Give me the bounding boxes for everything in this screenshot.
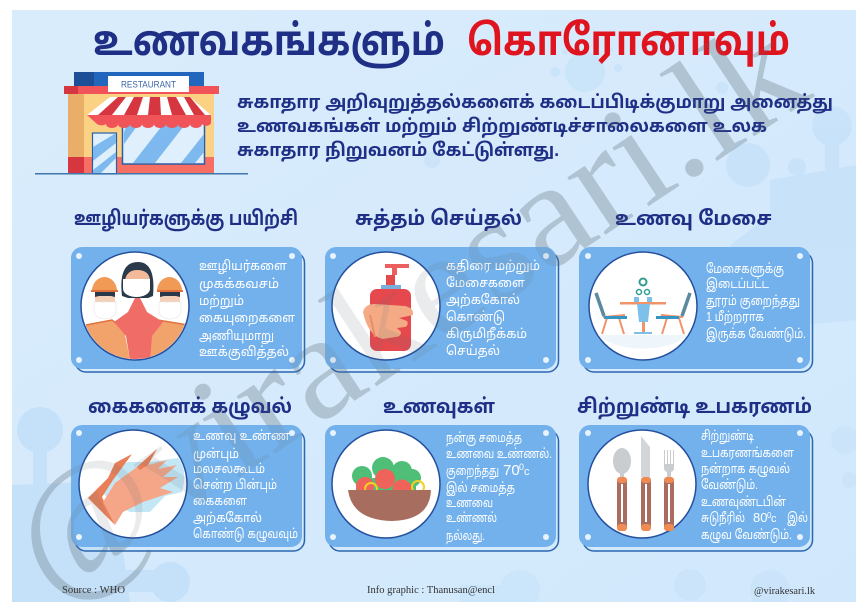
title: உணவகங்களும் (93, 17, 445, 69)
panel text: 1 மீற்றராக (706, 309, 764, 325)
panel text (701, 428, 808, 543)
ground line (35, 173, 248, 174)
restaurant sign (108, 76, 189, 92)
heading: சிற்றுண்டி உபகரணம் (577, 396, 812, 420)
panel text: உண்ணல் (446, 510, 497, 525)
icon: restaurant (35, 72, 248, 174)
panel text: அற்ககோல் (193, 510, 262, 526)
panel text: வேண்டும். (701, 477, 758, 493)
panel text: 0 (519, 462, 524, 472)
panel text: அணியுமாறு (199, 328, 274, 344)
intro text: உணவகங்கள் மற்றும் சிற்றுண்டிச்சாலைகளை உலக (237, 116, 767, 138)
panel: staff training (71, 208, 304, 372)
panel text: 0 (767, 511, 772, 520)
intro text: சுகாதார நிறுவனம் கேட்டுள்ளது. (237, 140, 559, 162)
intro text (237, 92, 833, 162)
footer credits: Source : WHO (62, 585, 125, 596)
panel text (706, 261, 806, 342)
panel text: ஊழியர்களை (199, 258, 287, 274)
panel text: நன்கு சமைத்த (446, 430, 522, 446)
icon: masked workers (81, 252, 190, 360)
icon: sanitizer bottle (332, 252, 440, 360)
shop window (122, 122, 204, 164)
heading: ஊழியர்களுக்கு பயிற்சி (74, 208, 298, 232)
awning (87, 97, 211, 128)
panel text: குறைந்தது (446, 463, 499, 479)
panel text: ஊக்குவித்தல் (199, 344, 289, 360)
panel text: கொண்டு (446, 309, 505, 325)
panel text: சுடுநீரில் (701, 510, 745, 526)
virus: top center (550, 47, 622, 92)
panel text: மற்றும் (199, 293, 244, 309)
panel text: முகக்கவசம் (199, 276, 279, 292)
panel text: கதிரை மற்றும் (446, 258, 540, 274)
panel text: அற்ககோல் (446, 292, 520, 308)
footer credits: @virakesari.lk (754, 586, 816, 597)
panel text: உணவை உண்ணல். (446, 446, 552, 461)
panel text: கையுறைகளை (199, 310, 295, 326)
panel text (446, 430, 552, 544)
panel text: செய்தல் (446, 343, 500, 359)
heading: கைகளைக் கழுவல் (88, 396, 292, 420)
panel text: உணவு உண்ண (193, 428, 291, 444)
panel text (193, 428, 298, 542)
panel text: கொண்டு கழுவவும் (193, 526, 298, 542)
panel text: c (524, 466, 530, 478)
panel text: நல்லது. (446, 528, 485, 544)
panel text: கைகளை (193, 493, 247, 508)
heading: உணவு மேசை (615, 207, 772, 231)
panel text: உணவுண்டபின் (701, 494, 786, 510)
heading: சுத்தம் செய்தல் (355, 207, 522, 231)
panel: food (325, 396, 558, 551)
panel text: கிருமிநீக்கம் (446, 326, 527, 342)
panel text: மலசலகூடம் (193, 461, 265, 476)
panel text: நன்றாக கழுவல் (701, 461, 790, 477)
panel text (446, 258, 540, 359)
panel text: இடைப்பட்ட (706, 276, 769, 292)
virus: right (726, 106, 856, 325)
panel text: இல் (787, 510, 808, 526)
panel text: இல் சமைத்த (446, 480, 515, 496)
virus: bottom left (12, 407, 190, 602)
icon: table and chairs (589, 252, 697, 360)
panel text: c (771, 513, 777, 525)
panel: cutlery (577, 396, 812, 551)
panel text (199, 258, 295, 360)
icon: salad bowl (332, 430, 440, 538)
panel text: முன்பும் (193, 446, 239, 462)
restaurant sign: RESTAURANT (121, 80, 176, 90)
icon: washing hands (79, 430, 187, 538)
panel text: 70 (503, 462, 520, 479)
title: கொரோனாவும் (467, 17, 790, 67)
panel text: உணவை (446, 495, 493, 510)
shop door (92, 133, 116, 174)
intro text: சுகாதார அறிவுறுத்தல்களைக் கடைப்பிடிக்குமாறு அனைத்து (237, 92, 833, 114)
panel text: கழுவ வேண்டும். (701, 527, 792, 543)
heading: உணவுகள் (383, 396, 495, 419)
panel text: சிற்றுண்டி (701, 428, 754, 444)
title (93, 17, 790, 69)
panel text: மேசைகளை (446, 275, 525, 290)
panel text: இருக்க வேண்டும். (706, 326, 806, 342)
panel: dining table (579, 207, 812, 372)
panel text: தூரம் குறைந்தது (706, 293, 800, 309)
icon: spoon, knife and fork (588, 430, 696, 538)
virus: lower right (460, 426, 859, 610)
virus: small near intro (424, 82, 728, 168)
panel text: மேசைகளுக்கு (706, 261, 784, 277)
footer credits (62, 585, 816, 597)
panel text: உபகரணங்களை (701, 445, 794, 460)
panel text: 80 (753, 510, 767, 525)
panel: cleaning (325, 207, 558, 372)
panel: hand washing (71, 396, 304, 551)
footer credits: Info graphic : Thanusan@encl (367, 585, 495, 596)
panel text: சென்ற பின்பும் (193, 477, 277, 493)
